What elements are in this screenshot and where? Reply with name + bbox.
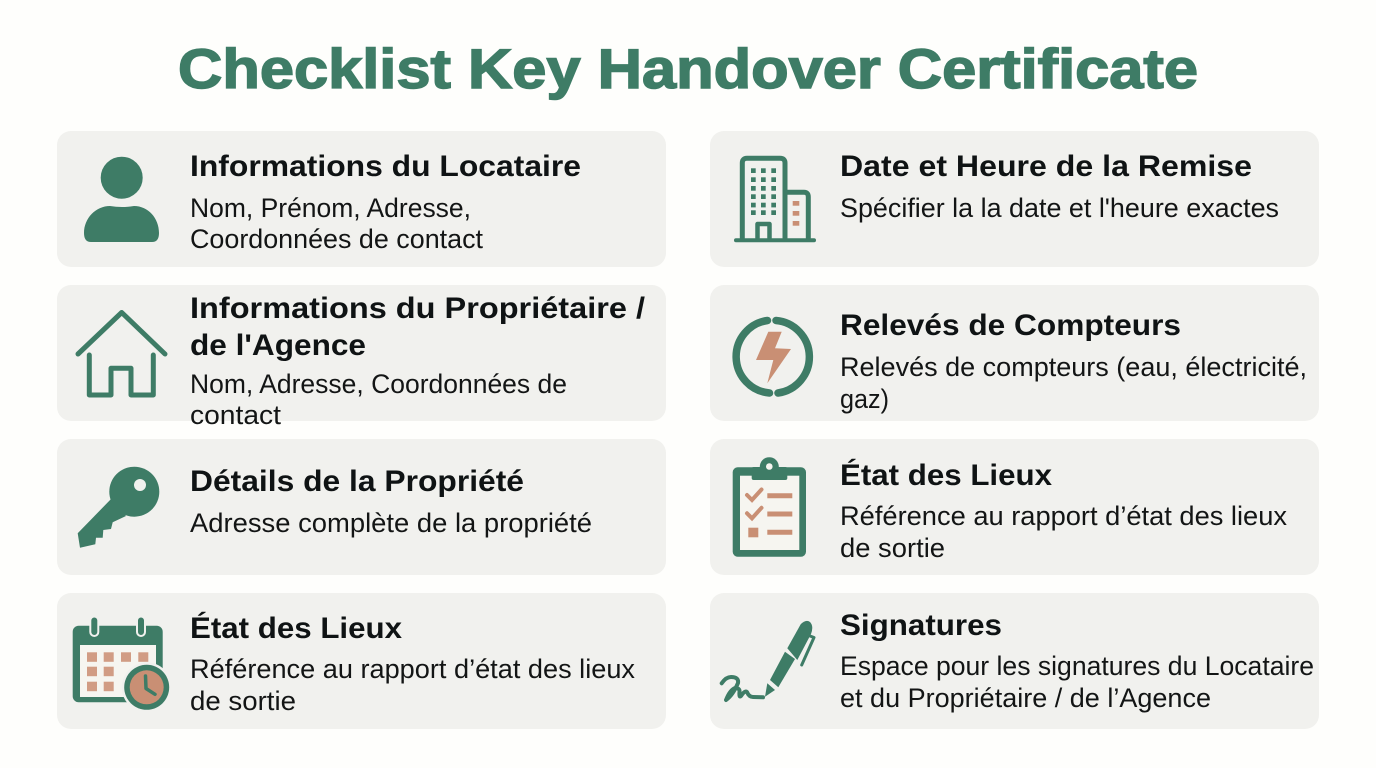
body text: de sortie bbox=[190, 686, 296, 716]
body text bbox=[190, 369, 567, 430]
body text bbox=[840, 501, 1287, 563]
icon: key bbox=[78, 467, 159, 548]
body text: Spécifier la la date et l'heure exactes bbox=[840, 193, 1279, 223]
heading: de l'Agence bbox=[190, 329, 366, 362]
title: Checklist Key Handover Certificate bbox=[178, 37, 1198, 100]
panel: informations du propriétaire bbox=[57, 285, 666, 430]
body text: Nom, Adresse, Coordonnées de bbox=[190, 369, 567, 399]
body text bbox=[190, 654, 635, 716]
panel: relevés de compteurs bbox=[710, 285, 1319, 421]
panel: informations du locataire bbox=[57, 131, 666, 267]
icon: energy meter bbox=[736, 320, 809, 393]
heading: Signatures bbox=[840, 609, 1002, 642]
heading: État des Lieux bbox=[190, 611, 402, 645]
icon: house bbox=[78, 312, 165, 395]
body text: Espace pour les signatures du Locataire bbox=[840, 651, 1314, 681]
panel: signatures bbox=[710, 593, 1319, 729]
panel: état des lieux (droite) bbox=[710, 439, 1319, 575]
body text bbox=[840, 651, 1314, 713]
body text: et du Propriétaire / de l’Agence bbox=[840, 683, 1211, 713]
icon: calendar with clock bbox=[73, 620, 172, 712]
body text: de sortie bbox=[840, 533, 945, 563]
body text: Référence au rapport d’état des lieux bbox=[190, 654, 635, 684]
body text: Relevés de compteurs (eau, électricité, bbox=[840, 352, 1307, 382]
panel: détails de la propriété bbox=[57, 439, 666, 575]
heading: Informations du Propriétaire / bbox=[190, 292, 646, 325]
icon: pen and signature bbox=[722, 621, 814, 700]
body text bbox=[840, 352, 1307, 414]
icon: clipboard bbox=[733, 457, 806, 557]
icon: building bbox=[736, 158, 814, 240]
panel: date et heure bbox=[710, 131, 1319, 267]
body text: gaz) bbox=[840, 384, 889, 414]
icon: person bbox=[84, 157, 159, 242]
body text: Adresse complète de la propriété bbox=[190, 508, 592, 538]
body text: contact bbox=[190, 400, 282, 430]
heading bbox=[190, 292, 646, 362]
body text: Coordonnées de contact bbox=[190, 224, 483, 254]
body text: Nom, Prénom, Adresse, bbox=[190, 193, 471, 223]
heading: Détails de la Propriété bbox=[190, 465, 524, 498]
heading: Relevés de Compteurs bbox=[840, 309, 1181, 342]
heading: Date et Heure de la Remise bbox=[840, 150, 1252, 183]
heading: État des Lieux bbox=[840, 458, 1052, 492]
body text bbox=[190, 193, 483, 254]
body text: Référence au rapport d’état des lieux bbox=[840, 501, 1287, 531]
heading: Informations du Locataire bbox=[190, 150, 581, 183]
panel: état des lieux (gauche) bbox=[57, 593, 666, 729]
